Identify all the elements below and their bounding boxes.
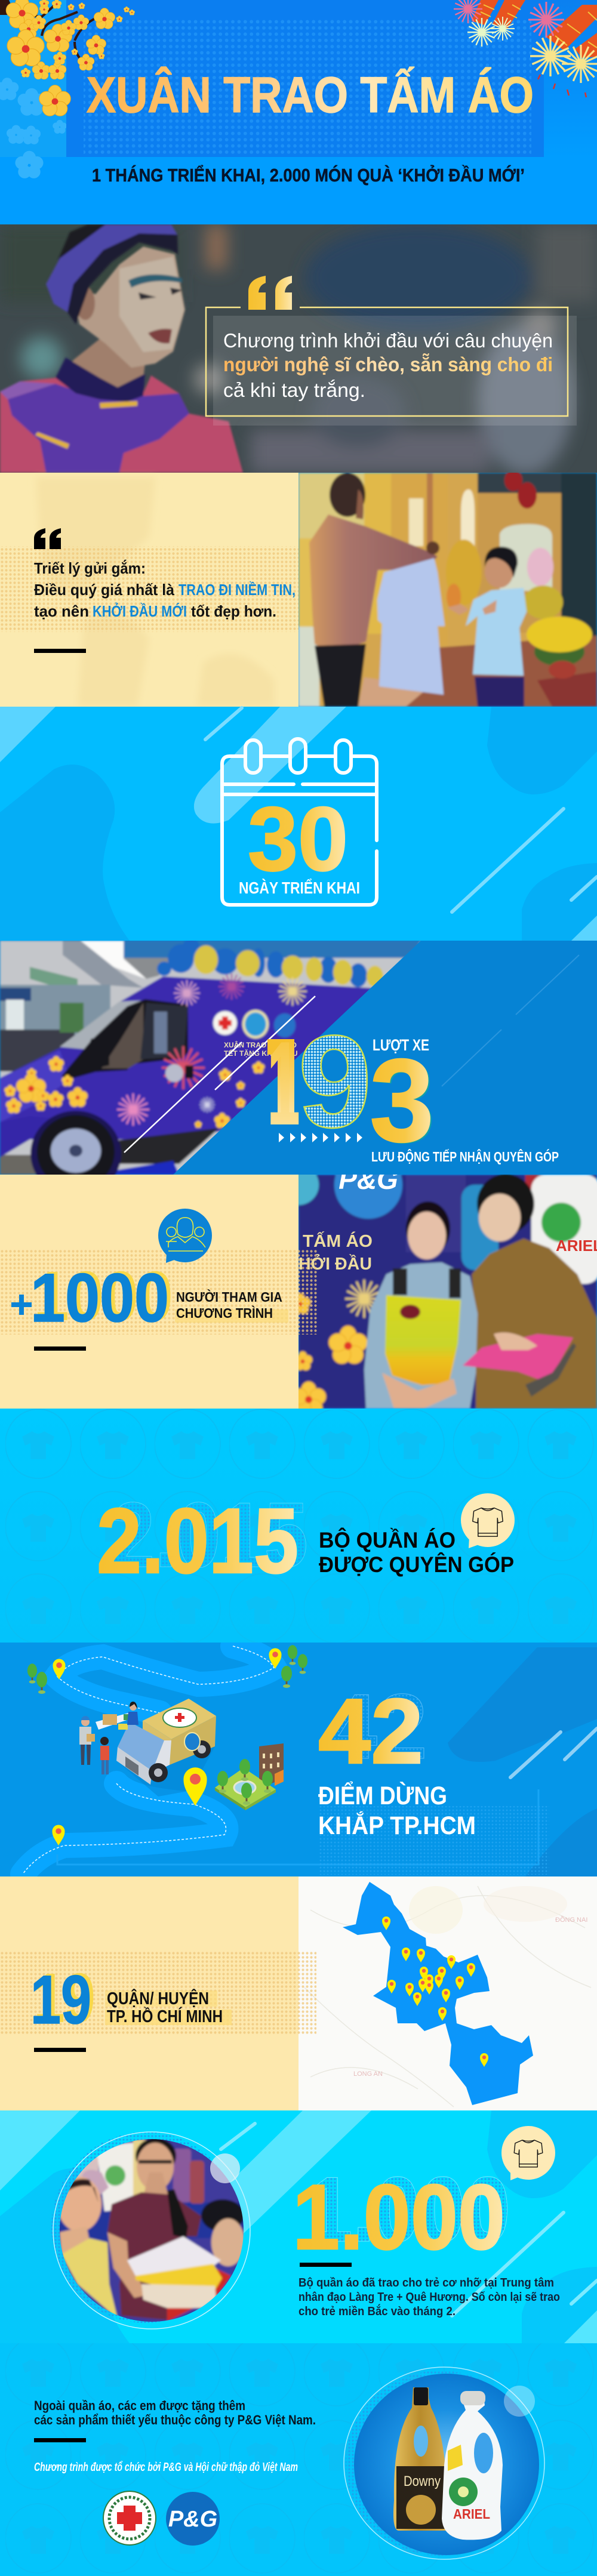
footer text: Ngoài quần áo, các em được tặng thêm — [34, 2398, 245, 2413]
stat: 42: 42 — [327, 1675, 427, 1778]
stat: 42: 42 — [318, 1680, 423, 1783]
map background: ĐỒNG NAI — [555, 1916, 587, 1924]
divider bar — [300, 2263, 352, 2267]
product circle — [344, 2367, 544, 2559]
pale flower background — [0, 78, 67, 178]
product: Ariel bottle — [442, 2391, 503, 2540]
panel: 30 days — [0, 707, 597, 941]
photo: two women with donations: P&G — [338, 1164, 398, 1195]
description text — [298, 2276, 560, 2318]
map background — [298, 1876, 597, 2110]
dotted crescent — [51, 2132, 240, 2323]
stat: 42 — [319, 1693, 424, 1764]
philosophy text: tạo nên — [34, 602, 89, 620]
panel: 19 districts — [0, 1876, 597, 2110]
label: lượt xe: LƯỢT XE — [373, 1036, 429, 1054]
label: quận huyện — [105, 1988, 232, 2026]
panel: header — [0, 0, 597, 224]
divider bar — [34, 2048, 86, 2052]
photo: two women with donations: HỞI ĐẦU — [298, 1253, 372, 1274]
photo: man handing robe to boy — [298, 470, 597, 707]
quote text: Chương trình khởi đầu với câu chuyện — [223, 329, 553, 352]
description text: Bộ quần áo đã trao cho trẻ cơ nhỡ tại Trung tâm — [298, 2276, 554, 2290]
photo ring — [53, 2132, 250, 2329]
label: điểm dừng: KHẮP TP.HCM — [318, 1811, 476, 1840]
dot band — [0, 1249, 298, 1335]
map pins — [382, 1916, 488, 2067]
road — [23, 1646, 274, 1874]
product: Downy bottle: Downy — [404, 2473, 441, 2489]
philosophy text: Triết lý gửi gắm: — [34, 559, 146, 577]
philosophy text: tốt đẹp hơn. — [191, 602, 276, 620]
stat: 1.000: 1.000 — [307, 2158, 510, 2261]
icon: quote mark — [248, 276, 292, 310]
icon: arrows — [279, 1133, 362, 1142]
label: người tham gia: NGƯỜI THAM GIA — [176, 1289, 282, 1305]
panel: artist quote — [0, 224, 597, 474]
footer text — [34, 2398, 316, 2427]
panel: 1000 participants — [0, 1175, 597, 1409]
stat: 193: 3 — [370, 1034, 434, 1166]
artist figure — [0, 224, 243, 473]
label: điểm dừng: ĐIỂM DỪNG — [318, 1781, 447, 1810]
title: XUÂN TRAO TẤM ÁO — [87, 67, 534, 123]
product: Ariel bottle: ARIEL — [453, 2506, 490, 2522]
label: bộ quần áo — [319, 1527, 514, 1577]
quote text: cả khi tay trắng. — [223, 379, 365, 401]
stat: 193 — [267, 1008, 436, 1167]
stat: 30: 30 — [248, 788, 348, 890]
logo: P&G: P&G — [168, 2507, 217, 2532]
photo: decorated van — [0, 939, 421, 1197]
label: ngày triển khai: NGÀY TRIỂN KHAI — [239, 879, 360, 897]
dot block — [319, 1806, 549, 1875]
title backing panel — [66, 0, 544, 157]
footer text: các sản phẩm thiết yếu thuộc công ty P&G Việt Nam. — [34, 2412, 316, 2427]
stat: 2.015: 2.015 — [97, 1489, 298, 1592]
stat: +1000: 1000 — [34, 1258, 173, 1335]
stat: +1000: 1000 — [30, 1260, 169, 1336]
photo: mother and children — [57, 2134, 248, 2325]
panel: 1000 given — [0, 2110, 597, 2343]
map background: LONG AN — [353, 2070, 383, 2078]
decorative translucent circle — [210, 2153, 240, 2183]
label: điểm dừng — [318, 1781, 474, 1835]
label: quận huyện: QUẬN/ HUYỆN — [107, 1988, 209, 2008]
description text: nhân đạo Làng Tre + Quê Hương. Số còn lại sẽ trao — [298, 2291, 560, 2304]
decorative translucent circle — [504, 2386, 535, 2417]
subtitle: 1 THÁNG TRIỂN KHAI, 2.000 MÓN QUÀ ‘KHỞI ĐẦU MỚI’ — [92, 164, 525, 186]
dot band — [0, 1951, 316, 2035]
label: người tham gia — [175, 1289, 288, 1323]
philosophy text: KHỞI ĐẦU MỚI — [93, 602, 187, 620]
icon: quote mark — [34, 528, 61, 549]
dot band over photo — [298, 1249, 318, 1335]
panel: footer — [0, 2343, 597, 2576]
product: Downy bottle — [393, 2387, 447, 2531]
panel: 2015 clothes — [0, 1409, 597, 1643]
label: người tham gia: CHƯƠNG TRÌNH — [176, 1305, 273, 1321]
map: Ho Chi Minh City — [343, 1882, 533, 2105]
panel: 42 stops — [0, 1643, 597, 1876]
stat: 193: 3 — [371, 1036, 436, 1167]
plum blossom branch — [0, 0, 135, 116]
dot band — [0, 546, 298, 632]
logo: P&G — [166, 2492, 220, 2546]
accent lines — [510, 1728, 597, 1777]
icon: shirt bubble — [501, 2126, 555, 2180]
divider bar — [34, 2438, 86, 2442]
photo: two women with donations: TẤM ÁO — [303, 1231, 373, 1251]
stat: 19: 19 — [30, 1962, 91, 2038]
background shapes — [0, 707, 597, 941]
frame line — [57, 1789, 538, 1865]
photo: decorated van: XUÂN TRAO TẤM ÁO — [224, 1040, 297, 1049]
illustration: truck — [116, 1699, 216, 1797]
label: bộ quần áo: BỘ QUẦN ÁO — [319, 1527, 456, 1552]
dashed route — [23, 1646, 274, 1874]
stat: 2.015: 2.015 — [111, 1483, 308, 1586]
translucent box — [213, 316, 577, 426]
logo: red cross — [103, 2491, 156, 2545]
icons: location pins — [53, 1648, 282, 1845]
background shapes — [448, 1647, 597, 1762]
divider bar — [34, 1346, 86, 1351]
firecrackers and fireworks — [454, 0, 597, 97]
philosophy text: Điều quý giá nhất là — [34, 581, 175, 599]
photo: decorated van: TẾT TẶNG KHỞI ĐẦU — [224, 1049, 298, 1058]
photo: two women with donations — [298, 1175, 597, 1409]
yellow frame — [206, 307, 568, 416]
illustration: volunteers — [79, 1702, 139, 1774]
stat: 1.000: 1.000 — [293, 2165, 505, 2269]
philosophy text: TRAO ĐI NIỀM TIN, — [179, 581, 296, 599]
panel: 193 mobile trucks — [0, 939, 597, 1197]
background shapes — [0, 2110, 597, 2343]
label: bộ quần áo: ĐƯỢC QUYÊN GÓP — [319, 1552, 514, 1577]
icon: calendar — [222, 739, 377, 905]
quote text: người nghệ sĩ chèo, sẵn sàng cho đi — [223, 353, 553, 375]
panel: philosophy — [0, 470, 597, 707]
organiser note: Chương trình được tổ chức bởi P&G và Hội chữ thập đỏ Việt Nam — [34, 2461, 298, 2474]
background diagonals — [442, 955, 579, 1086]
divider bar — [34, 649, 86, 653]
icons: trees — [27, 1645, 307, 1694]
stat: 19: 19 — [34, 1960, 95, 2036]
quote text — [223, 329, 553, 401]
stat: 193: 9 — [298, 1008, 372, 1155]
icon: people bubble — [158, 1209, 212, 1263]
philosophy text — [34, 559, 296, 620]
illustration: park and building — [215, 1743, 284, 1810]
ghost figures — [36, 477, 275, 707]
label: quận huyện: TP. HỒ CHÍ MINH — [107, 2006, 223, 2026]
icon: shirt bubble — [461, 1493, 515, 1548]
dot pattern — [84, 19, 531, 155]
blurred photo background — [0, 224, 597, 474]
stat: 193: 1 — [267, 1017, 300, 1150]
description text: cho trẻ miền Bắc vào tháng 2. — [298, 2304, 456, 2318]
